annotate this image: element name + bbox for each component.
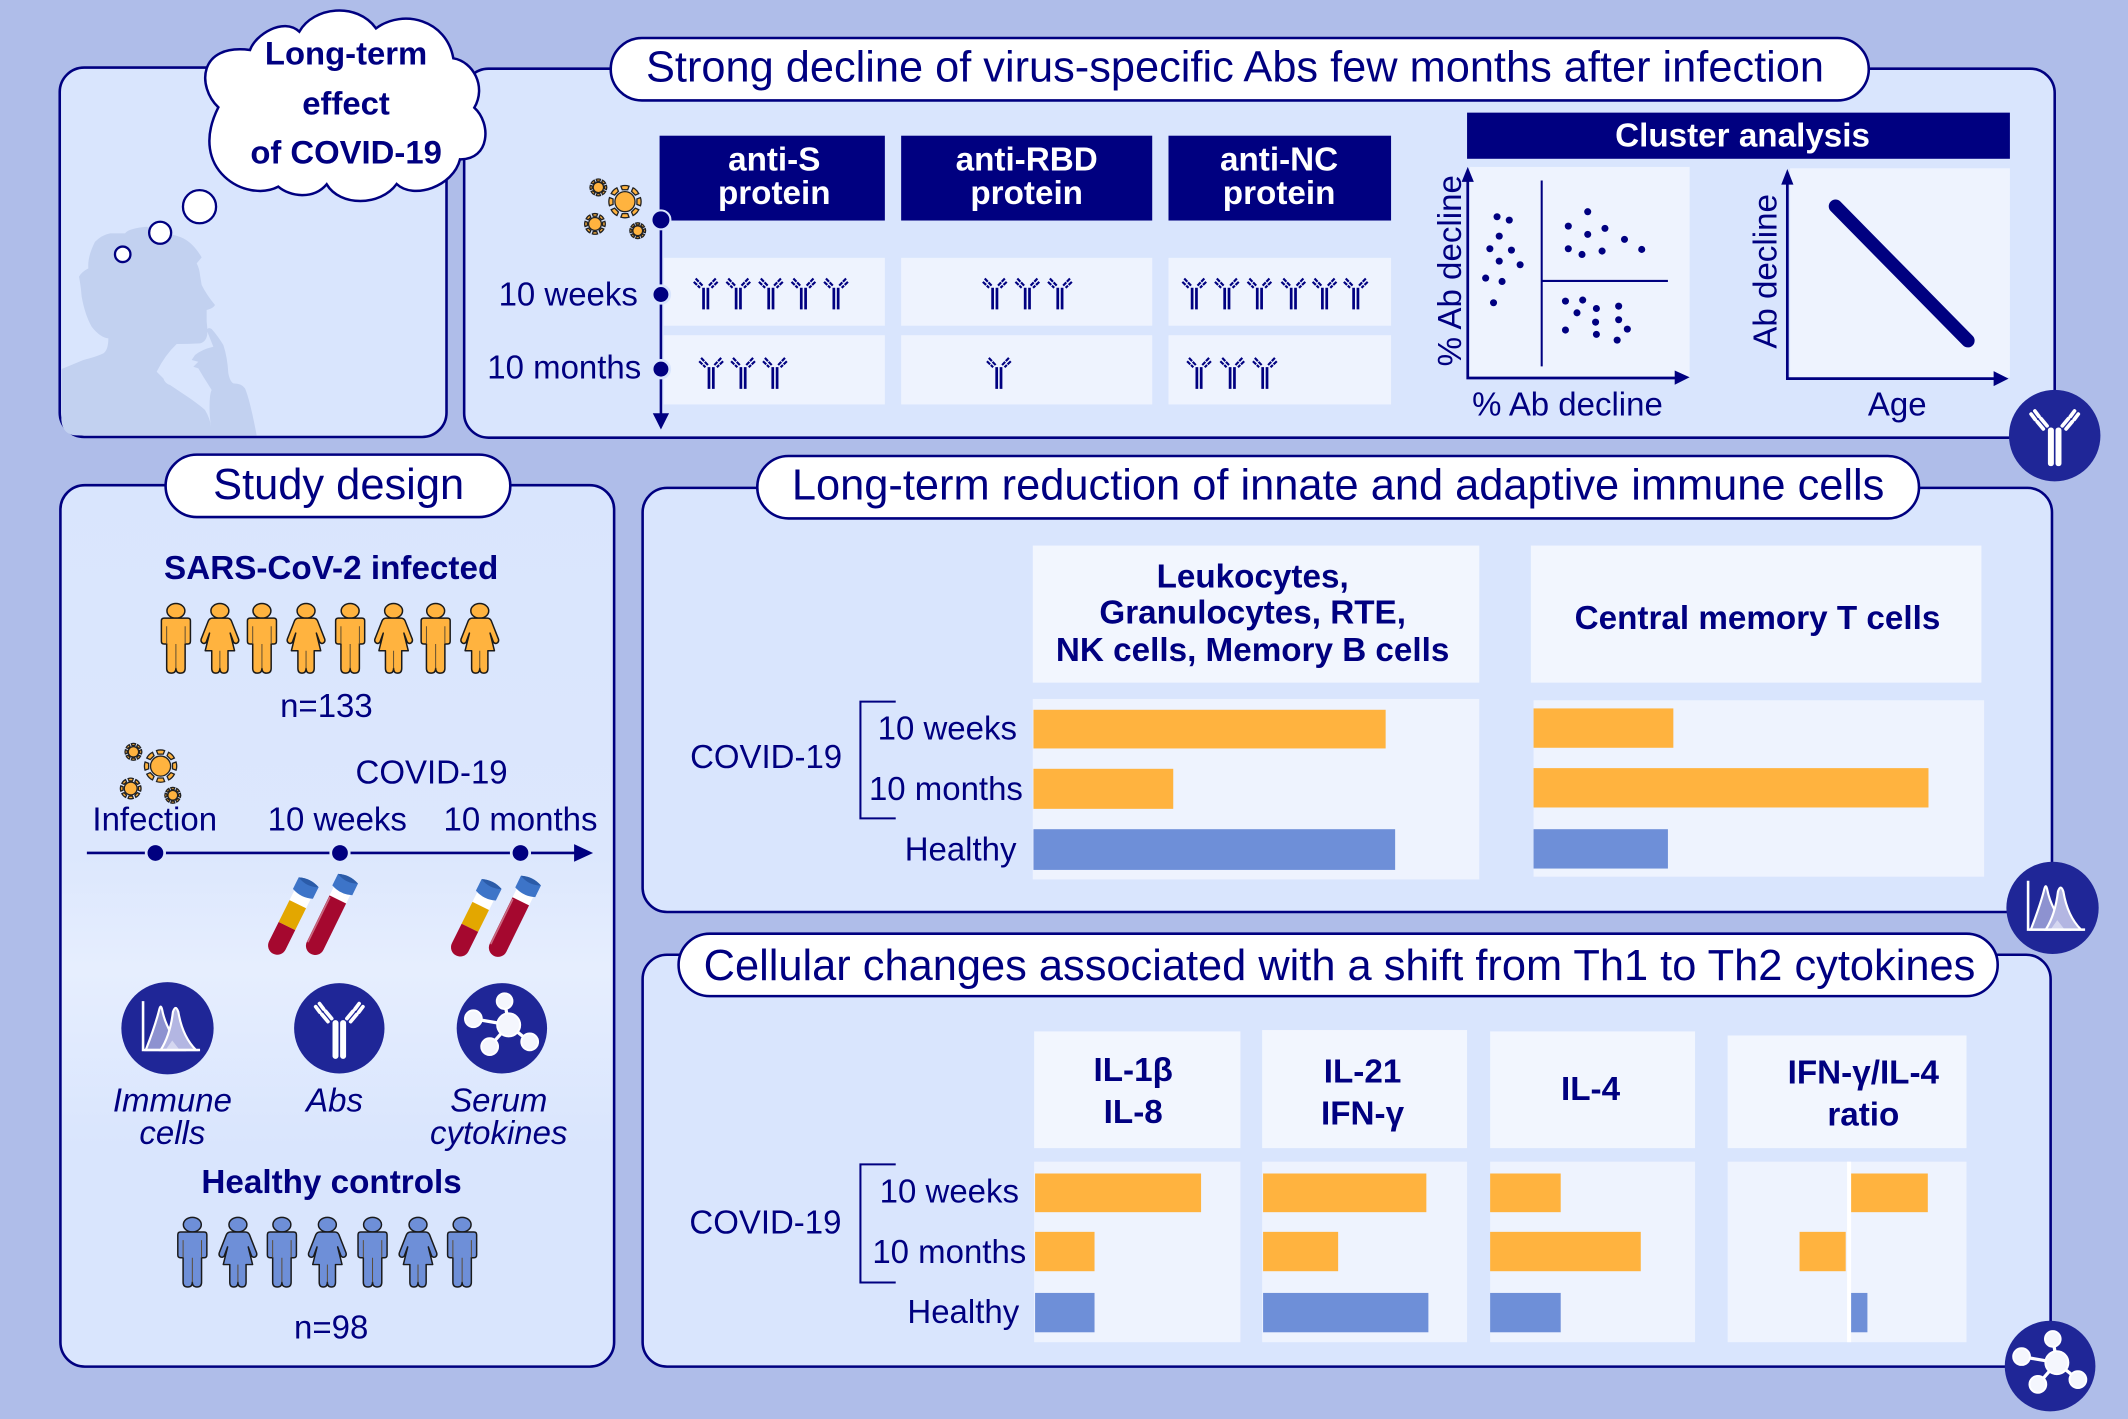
column: IL-21 IFN-g: IL-21 (1324, 1053, 1401, 1090)
callout: thought cloud: Long-term (265, 34, 427, 71)
row labels (689, 1164, 1026, 1330)
infected cohort heading: SARS-CoV-2 infected (164, 550, 498, 587)
row labels: Healthy (905, 830, 1017, 867)
vertical timeline (487, 210, 670, 430)
cluster analysis header (1467, 113, 2010, 159)
table headers (660, 136, 1391, 221)
horizontal timeline: 10 months (443, 801, 597, 838)
horizontal timeline: COVID-19 (356, 754, 508, 791)
column header: leukocytes (1033, 546, 1479, 683)
heading: cytokines: Cellular changes associated with a shift from Th1 to Th2 cytokines (704, 942, 1975, 990)
row labels: 10 weeks (878, 710, 1017, 747)
column header: central memory (1531, 546, 1981, 683)
column: IL-21 IFN-g (1262, 1030, 1467, 1342)
column: IFN-g/IL-4 ratio: IFN-γ/IL-4 (1788, 1055, 1940, 1092)
column header: leukocytes: Granulocytes, RTE, (1099, 595, 1406, 632)
n healthy: n=98 (294, 1309, 368, 1346)
measurement labels (113, 1081, 567, 1151)
scatter plot: % Ab decline (1472, 385, 1663, 422)
panel: patient reflection (60, 68, 447, 437)
bar chart: leukocytes (1033, 699, 1479, 879)
scatter plot (1431, 167, 1690, 422)
table headers: anti-NC (1220, 141, 1338, 178)
panel: study design (60, 455, 614, 1367)
column header: leukocytes: NK cells, Memory B cells (1056, 632, 1449, 669)
table headers: anti-RBD (956, 141, 1098, 178)
antibodies at 10 weeks (694, 278, 1368, 309)
panel: antibody decline (464, 38, 2055, 438)
panel: immune cells (643, 456, 2052, 912)
icon: antibodies (294, 983, 384, 1073)
panel: cytokines (643, 934, 2051, 1367)
table row backgrounds (664, 258, 1391, 404)
callout: thought cloud (205, 10, 485, 201)
icon: immune cell badge (2006, 862, 2099, 954)
measurement labels: cytokines (430, 1114, 567, 1151)
icon: serum cytokines (457, 983, 547, 1073)
row labels: 10 weeks (880, 1172, 1019, 1209)
age correlation plot: Ab decline (1746, 194, 1783, 349)
column: IL-4 (1490, 1031, 1695, 1342)
row labels: 10 months (869, 770, 1023, 807)
scatter plot: % Ab decline (1431, 175, 1468, 366)
horizontal timeline (87, 754, 597, 862)
horizontal timeline: Infection (92, 801, 217, 838)
column: IL-1b IL-8: IL-1β (1094, 1052, 1173, 1089)
icon: cytokine badge (2005, 1321, 2095, 1411)
column header: leukocytes: Leukocytes, (1157, 559, 1349, 596)
vertical timeline: 10 months (487, 349, 641, 386)
infected people icons (161, 604, 499, 673)
icon: immune cells (121, 982, 214, 1074)
table headers: anti-S (728, 141, 820, 178)
healthy people icons (178, 1217, 477, 1287)
column: IFN-g/IL-4 ratio: ratio (1827, 1097, 1899, 1134)
column header: central memory: Central memory T cells (1575, 600, 1940, 637)
row labels: 10 months (872, 1233, 1026, 1270)
measurement labels: cells (139, 1114, 205, 1151)
table headers: protein (718, 175, 831, 212)
row labels: Healthy (907, 1293, 1020, 1330)
heading: immune cells: Long-term reduction of innate and adaptive immune cells (792, 461, 1884, 509)
vertical timeline: 10 weeks (499, 275, 638, 312)
virus icon (120, 743, 181, 803)
age correlation plot (1746, 168, 2010, 422)
column: IFN-g/IL-4 ratio (1728, 1035, 1966, 1342)
column: IL-4: IL-4 (1561, 1071, 1621, 1108)
healthy controls heading: Healthy controls (201, 1164, 462, 1201)
measurement labels: Abs (304, 1081, 363, 1118)
cluster analysis header: Cluster analysis (1615, 118, 1870, 155)
person silhouette (61, 227, 257, 435)
blood tubes at 10 weeks (263, 872, 359, 959)
table headers: protein (970, 175, 1083, 212)
heading: study design: Study design (213, 461, 464, 509)
row labels: COVID-19 (689, 1204, 841, 1241)
blood tubes at 10 months (446, 874, 542, 961)
callout: thought cloud: effect (302, 84, 390, 121)
column: IL-1b IL-8 (1034, 1031, 1240, 1342)
row labels (690, 702, 1023, 867)
column: IL-1b IL-8: IL-8 (1104, 1094, 1163, 1131)
virus icon (585, 179, 646, 239)
icon: antibody badge (2009, 390, 2100, 481)
column: IL-21 IFN-g: IFN-γ (1321, 1095, 1405, 1132)
heading: study design (166, 455, 510, 517)
title: antibody decline: Strong decline of virus-specific Abs few months after infection (646, 43, 1824, 91)
age correlation plot: Age (1868, 385, 1927, 422)
thought bubbles (115, 190, 216, 262)
horizontal timeline: 10 weeks (268, 801, 407, 838)
antibodies at 10 months (699, 358, 1277, 389)
bar chart: central memory (1534, 700, 1984, 877)
callout: thought cloud: of COVID-19 (250, 134, 442, 171)
measurement labels: Immune (113, 1081, 232, 1118)
row labels: COVID-19 (690, 738, 842, 775)
n infected: n=133 (280, 687, 373, 724)
table headers: protein (1223, 175, 1335, 212)
measurement labels: Serum (450, 1081, 547, 1118)
